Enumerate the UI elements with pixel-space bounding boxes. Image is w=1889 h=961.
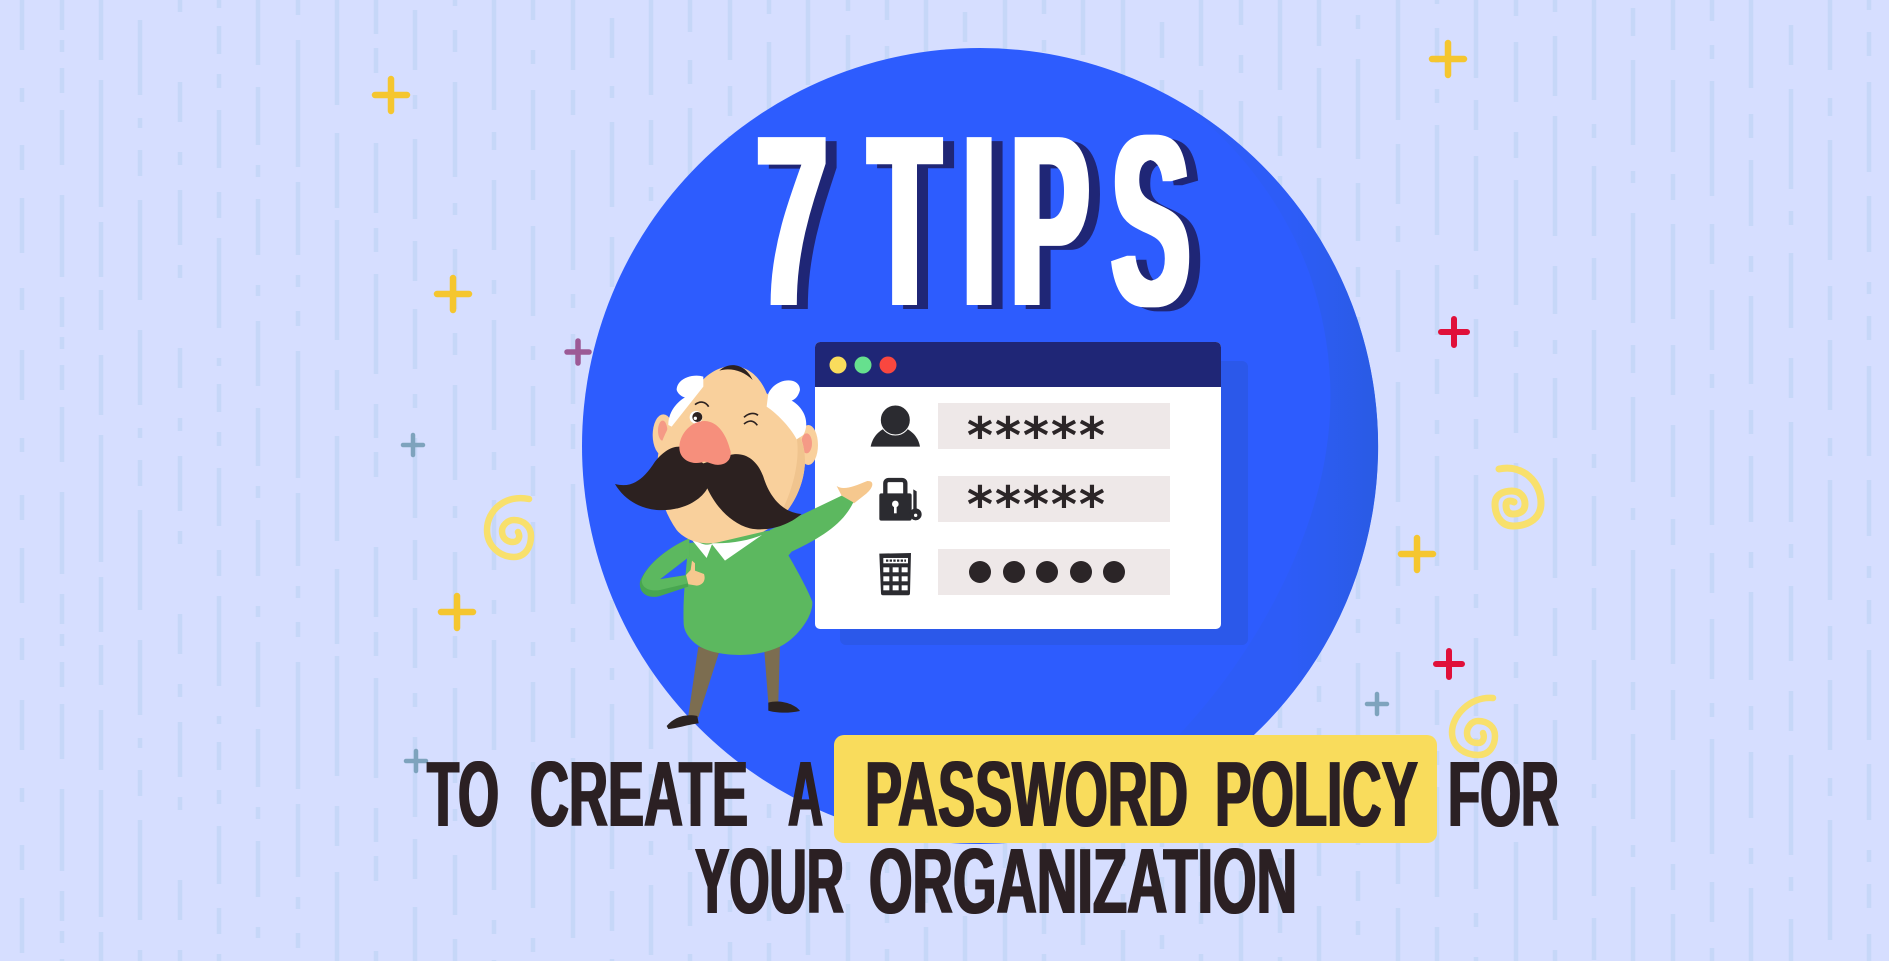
pointing arm bbox=[770, 496, 853, 570]
subtitle line 1: POLICY bbox=[1215, 742, 1418, 846]
window body bbox=[815, 342, 1221, 629]
plus: red bbox=[1441, 319, 1467, 345]
nose bbox=[679, 421, 731, 465]
subtitle line 1: TO bbox=[427, 742, 499, 846]
character: mustached mascot bbox=[615, 365, 872, 729]
white hair bbox=[668, 376, 806, 439]
plus: yellow lower left bbox=[441, 596, 473, 628]
plus: slate right bbox=[1367, 694, 1387, 714]
sweater body bbox=[683, 530, 812, 655]
subtitle line 2 bbox=[695, 829, 1297, 933]
spiral: lower right bbox=[1452, 698, 1495, 755]
password asterisks: ***** bbox=[967, 476, 1105, 534]
spiral: upper right bbox=[1495, 468, 1541, 526]
thumbs-up hand bbox=[686, 561, 705, 586]
icon: padlock and key bbox=[879, 480, 922, 521]
subtitle line 1 bbox=[427, 742, 1559, 846]
icon: user bbox=[871, 405, 920, 447]
window control dots bbox=[830, 356, 896, 374]
login window bbox=[815, 342, 1248, 645]
username field bbox=[938, 403, 1170, 449]
plus: yellow left bbox=[437, 278, 469, 310]
mustache bbox=[615, 447, 802, 529]
head bbox=[657, 366, 805, 543]
username asterisks: ***** bbox=[967, 407, 1105, 465]
subtitle line 1: FOR bbox=[1448, 742, 1559, 846]
collar bbox=[691, 535, 762, 561]
plus: yellow top right bbox=[1432, 43, 1464, 75]
icon: keypad bbox=[879, 553, 911, 595]
subtitle line 1: PASSWORD bbox=[865, 742, 1188, 846]
subtitle line 2: ORGANIZATION bbox=[869, 829, 1297, 933]
title: 7 TIPS: 7 bbox=[756, 86, 827, 358]
plus markers bbox=[375, 43, 1467, 771]
hair tuft bbox=[719, 365, 753, 380]
window title bar bbox=[815, 342, 1221, 387]
subtitle line 1: CREATE bbox=[530, 742, 748, 846]
legs bbox=[688, 647, 719, 717]
subtitle line 1: A bbox=[788, 742, 823, 846]
spiral: left bbox=[487, 498, 531, 557]
folded arm bbox=[640, 538, 689, 597]
window shadow bbox=[840, 361, 1248, 645]
plus: red lower bbox=[1436, 651, 1462, 677]
plus: purple bbox=[567, 341, 589, 363]
password field bbox=[938, 476, 1170, 522]
ears bbox=[653, 414, 818, 465]
blue circle bbox=[582, 48, 1378, 844]
head shading bbox=[763, 427, 805, 532]
pin dots bbox=[969, 561, 1125, 583]
plus: yellow right bbox=[1401, 538, 1433, 570]
plus: slate bbox=[403, 435, 423, 455]
highlight box bbox=[834, 735, 1437, 843]
shoes bbox=[667, 715, 699, 729]
pin field bbox=[938, 549, 1170, 595]
subtitle line 2: YOUR bbox=[695, 829, 844, 933]
title: 7 TIPS: TIPS bbox=[869, 84, 1190, 357]
pointing hand bbox=[837, 481, 872, 503]
plus: slate bottom bbox=[406, 751, 426, 771]
plus: yellow bbox=[375, 79, 407, 111]
eyes and brows bbox=[690, 402, 758, 425]
